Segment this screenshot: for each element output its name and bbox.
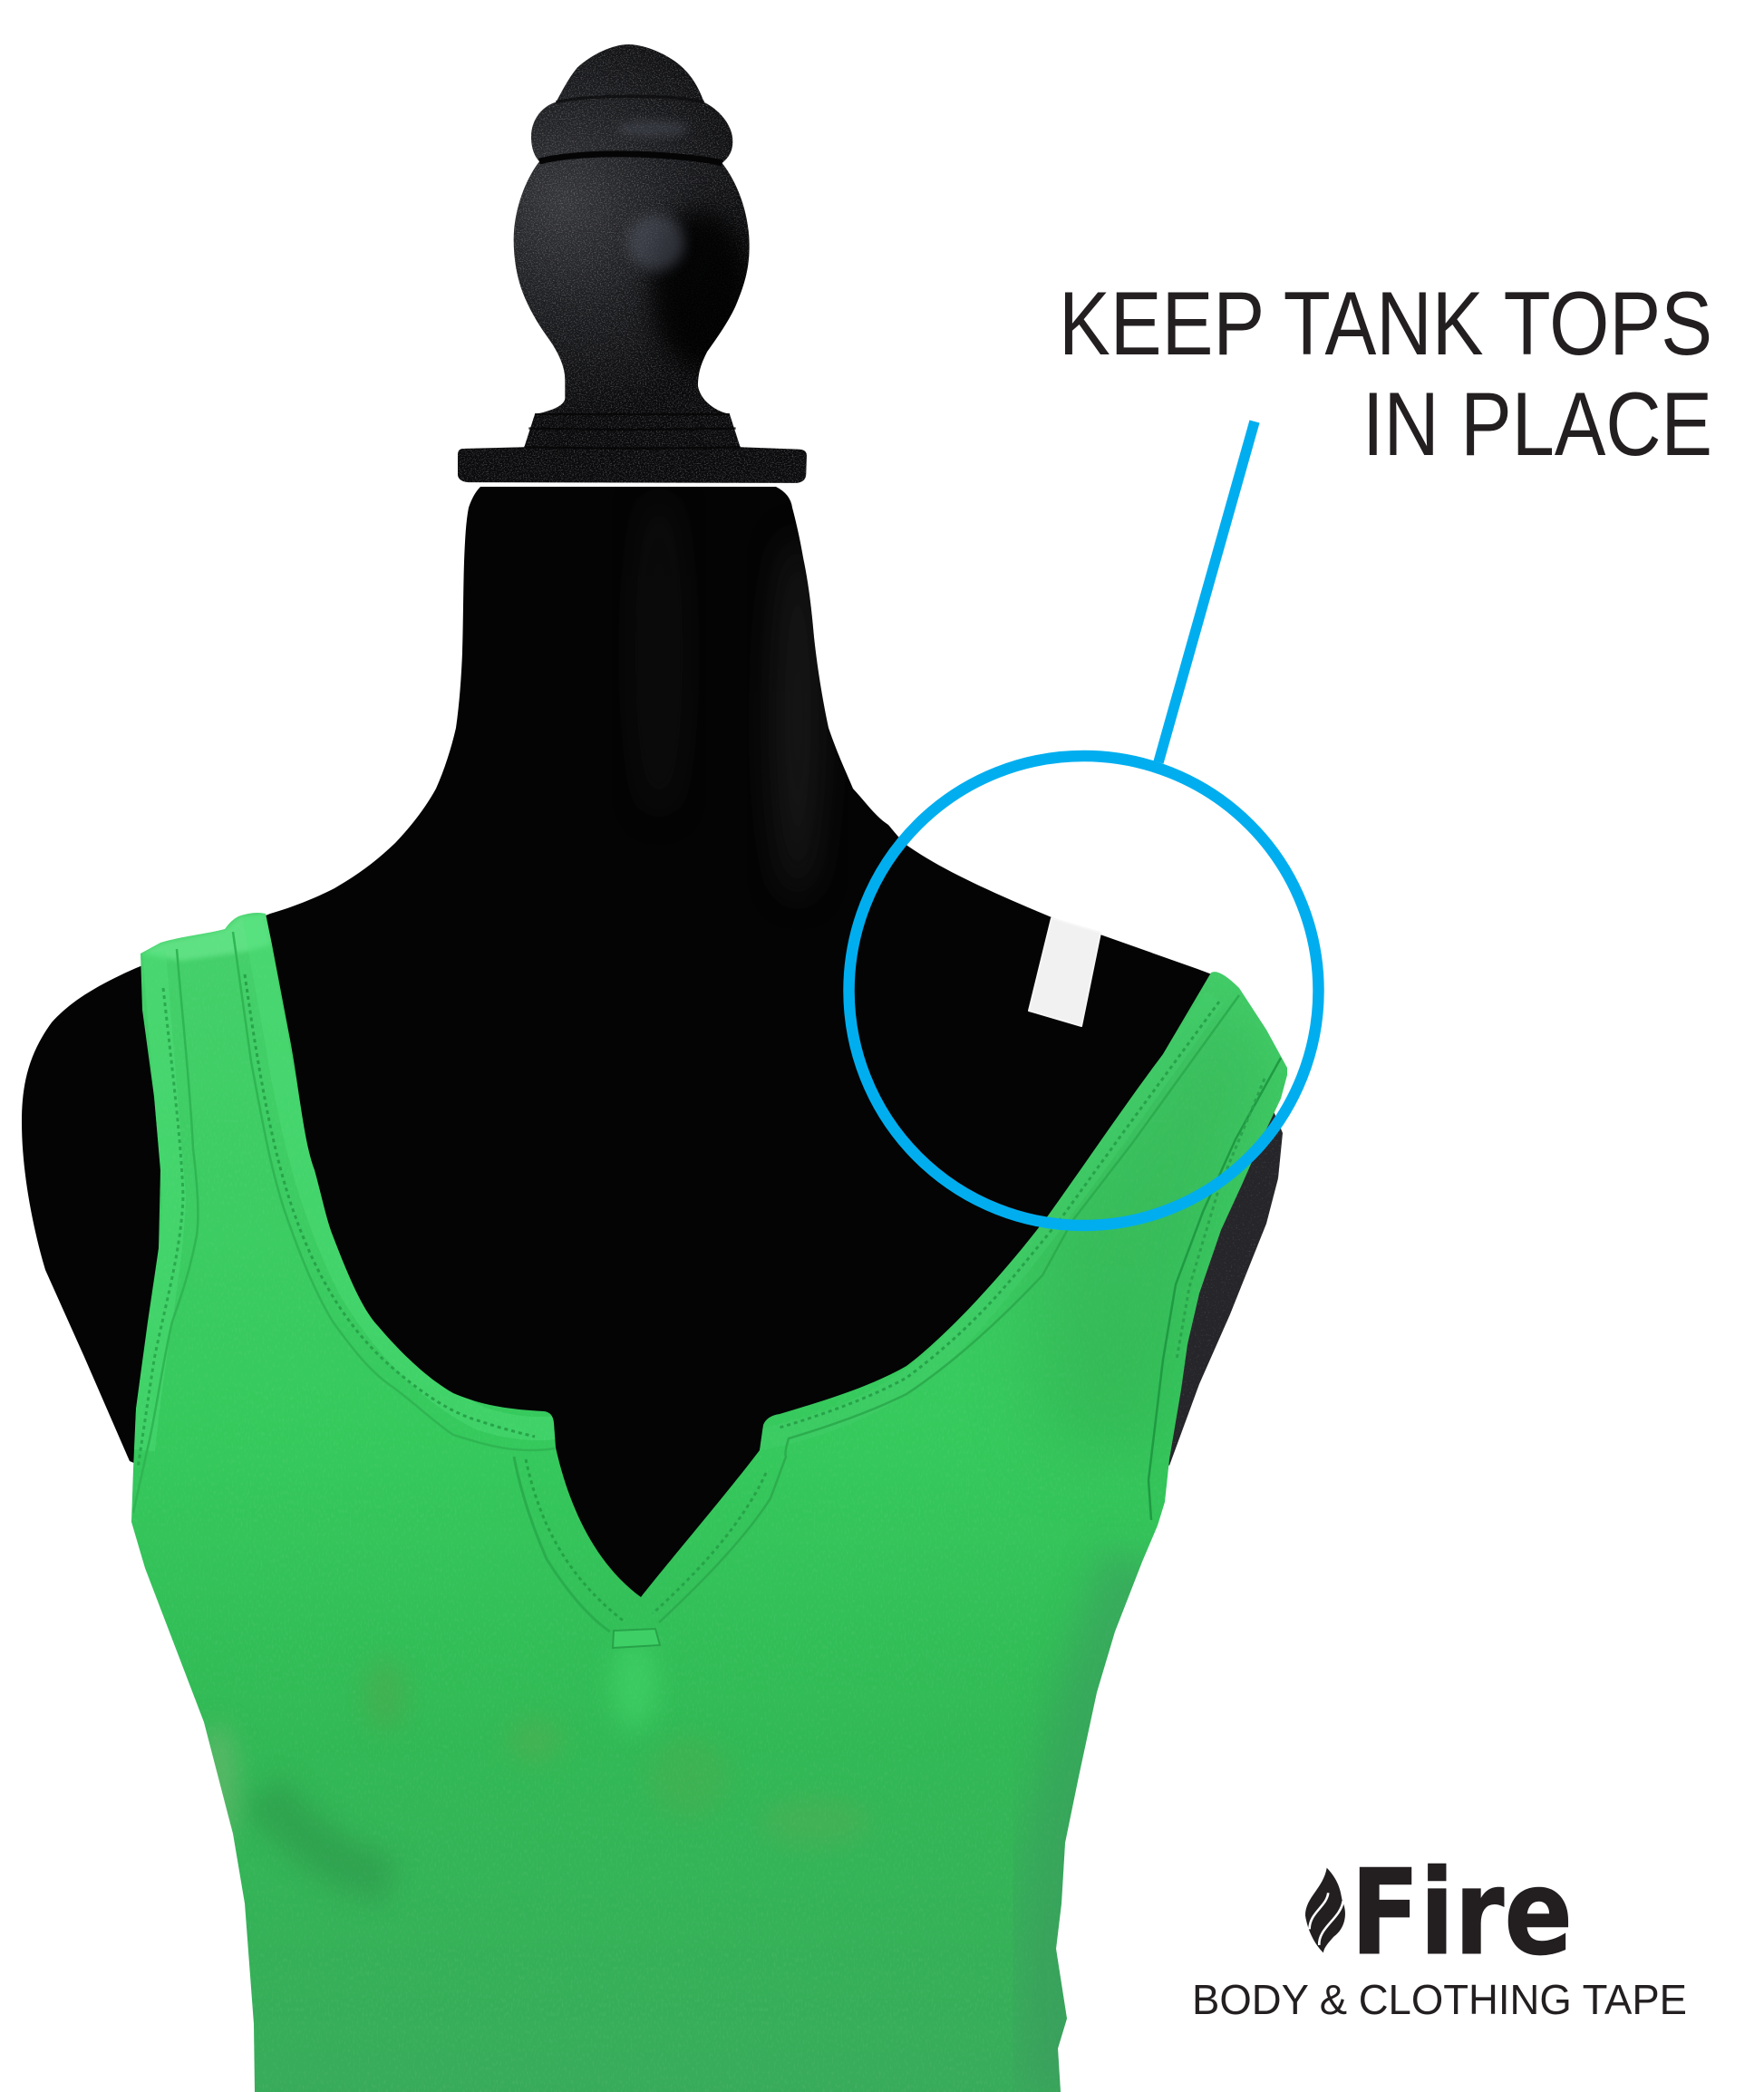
right neckline seam: [659, 995, 1239, 1622]
velvet sheen on neck: [769, 551, 829, 877]
callout circle and leader line: [848, 421, 1318, 1225]
callout circle: [848, 756, 1318, 1225]
heading: keep tank tops in place: [1059, 273, 1712, 474]
green tank top: [131, 913, 1287, 2092]
tagline: BODY & CLOTHING TAPE: [1192, 1976, 1687, 2023]
left V-neck placket seam: [514, 1457, 610, 1632]
hem bands: [281, 1104, 555, 1440]
mannequin with green tank top: [0, 44, 1360, 2092]
tape strip on shoulder: [1029, 918, 1100, 1026]
wordmark: Fire: [1351, 1844, 1573, 1981]
finial shading: [616, 120, 752, 371]
left neckline seam: [233, 932, 555, 1450]
leader line: [1158, 421, 1255, 762]
finial texture: [458, 44, 807, 483]
heading: keep tank tops in place: IN PLACE: [1362, 373, 1712, 474]
finial knob on mannequin: [458, 44, 807, 483]
mannequin black velvet torso: [22, 487, 1219, 1677]
icon: flame: [1305, 1868, 1345, 1952]
mannequin right arm: [1151, 1079, 1283, 1466]
V-neck bar tack: [613, 1629, 660, 1648]
tank top fabric shading: [91, 888, 1314, 2092]
right armhole seam: [1149, 1058, 1281, 1520]
brand logo: Fire body and clothing tape: [1192, 1844, 1687, 2023]
left armhole seam: [133, 949, 198, 1513]
